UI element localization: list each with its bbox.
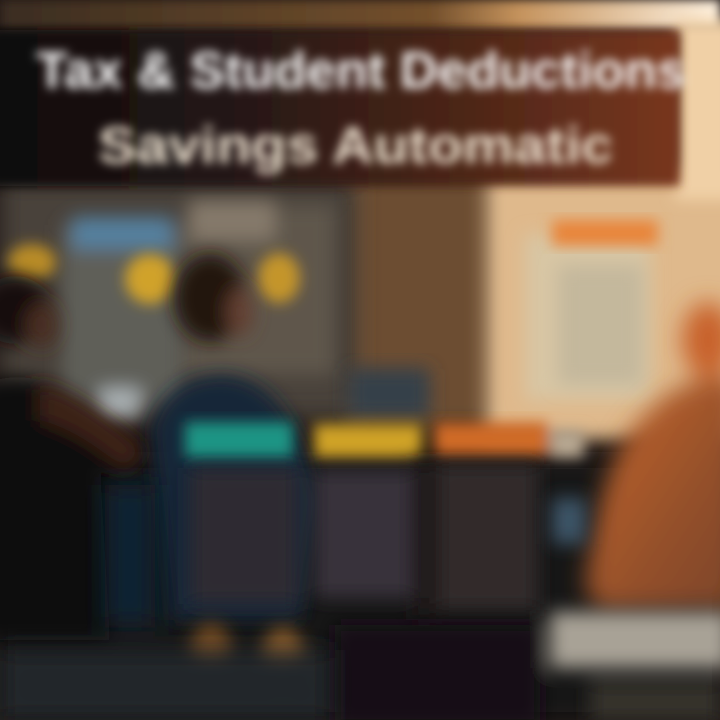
table header: orange xyxy=(434,422,548,456)
figure: person left xyxy=(0,276,150,640)
icon: orange dots xyxy=(191,624,304,688)
table header: yellow xyxy=(314,424,422,458)
table header: teal xyxy=(185,422,293,458)
figure: person centre xyxy=(150,254,320,620)
figure: person right xyxy=(585,302,720,610)
title text: Tax & Student Deductions xyxy=(36,42,686,100)
title banner xyxy=(0,30,686,186)
panel: right chart on wall xyxy=(525,220,658,400)
tables: column headers xyxy=(185,422,584,458)
tables: dark columns xyxy=(190,460,538,620)
title text: Savings Automatic xyxy=(98,117,613,175)
title text xyxy=(36,42,686,175)
bottom left shade xyxy=(0,485,330,720)
table header: pale xyxy=(550,430,584,458)
lower right desk xyxy=(335,498,720,720)
icon: yellow circles xyxy=(8,244,300,304)
whiteboard panel: left xyxy=(62,200,335,418)
panel: small dark screen xyxy=(348,368,430,418)
